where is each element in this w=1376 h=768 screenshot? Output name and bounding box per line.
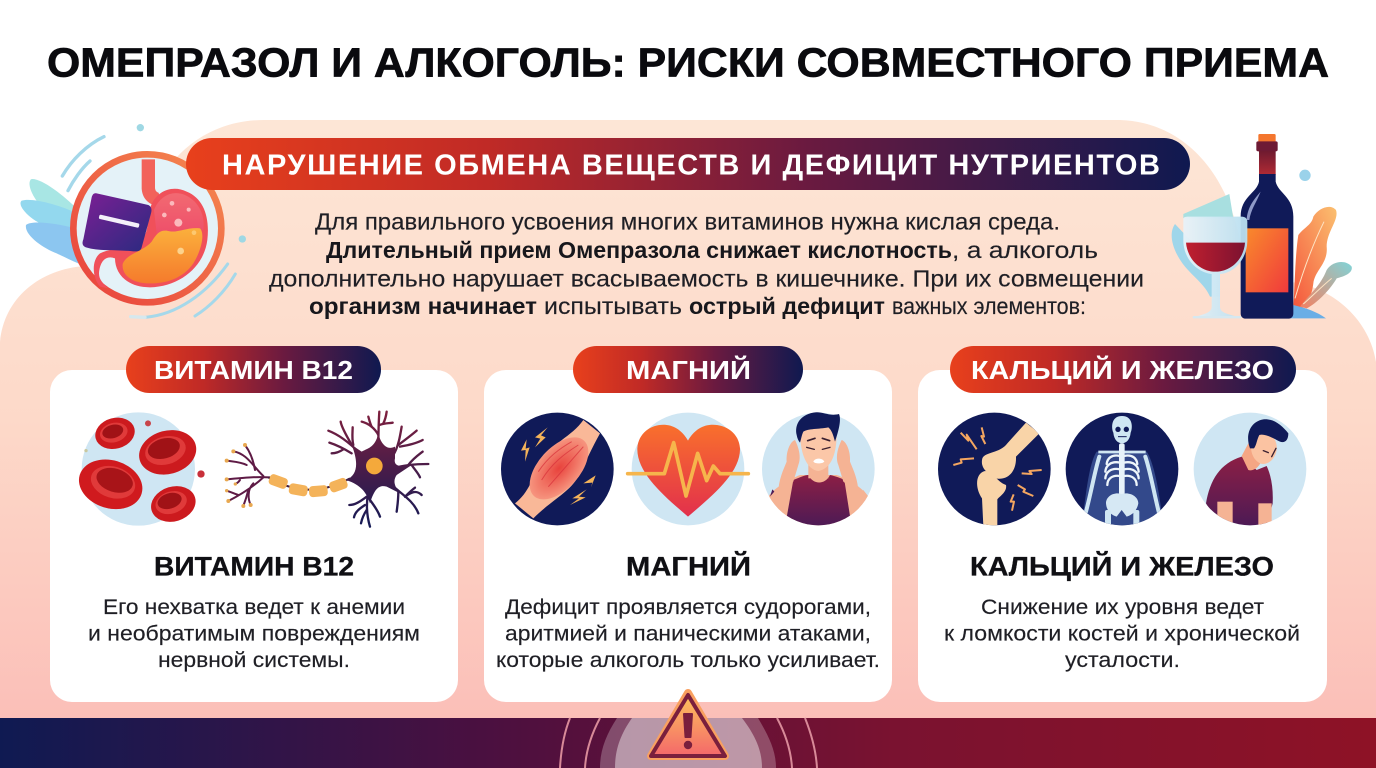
card heading: МАГНИЙ xyxy=(626,550,751,582)
card text: к ломкости костей и хронической xyxy=(944,622,1300,646)
card text: нервной системы. xyxy=(158,648,350,672)
intro text block: дополнительно нарушает всасываемость в кишечнике. При их совмещении xyxy=(269,266,1144,292)
intro text block: острый дефицит xyxy=(689,293,885,319)
icon: skeleton x-ray xyxy=(1066,413,1178,527)
pill label xyxy=(126,346,381,393)
bottom warning band xyxy=(0,718,1376,768)
card text: Его нехватка ведет к анемии xyxy=(103,595,405,619)
panel: magnesium xyxy=(484,346,892,702)
left dendrites xyxy=(227,445,270,506)
card text xyxy=(944,595,1300,672)
intro text block: важных элементов: xyxy=(892,293,1086,319)
leaves xyxy=(1293,207,1337,308)
intro text block xyxy=(269,208,1144,319)
icon: muscle cramp xyxy=(501,413,614,525)
section heading pill: НАРУШЕНИЕ ОБМЕНА ВЕЩЕСТВ И ДЕФИЦИТ НУТРИЕНТОВ xyxy=(222,150,1160,182)
pill label: КАЛЬЦИЙ И ЖЕЛЕЗО xyxy=(971,355,1274,385)
intro text block: испытывать xyxy=(544,293,682,319)
wings xyxy=(20,179,78,263)
icon: person with headache xyxy=(762,412,875,530)
intro text block: , а алкоголь xyxy=(952,237,1098,263)
pill label: ВИТАМИН B12 xyxy=(154,355,353,385)
card heading: ВИТАМИН B12 xyxy=(154,552,354,582)
intro text block: Для правильного усвоения многих витаминов нужна кислая среда. xyxy=(315,208,1060,234)
pill label xyxy=(950,346,1296,393)
icon: heart with pulse xyxy=(628,413,748,525)
motion lines xyxy=(62,137,235,317)
background blob panel xyxy=(0,120,1376,718)
icon: stomach with pill xyxy=(20,124,246,317)
soma xyxy=(346,433,412,503)
card text xyxy=(496,595,880,672)
title: ОМЕПРАЗОЛ И АЛКОГОЛЬ: РИСКИ СОВМЕСТНОГО ПРИЕМА xyxy=(47,40,1329,86)
blue backdrop shape xyxy=(1183,194,1233,218)
card text: Дефицит проявляется судорогами, xyxy=(505,595,871,619)
section heading pill xyxy=(186,138,1190,190)
purple pill xyxy=(83,193,151,251)
esophagus and stomach xyxy=(148,159,160,199)
card heading: КАЛЬЦИЙ И ЖЕЛЕЗО xyxy=(970,550,1274,582)
axon xyxy=(268,477,350,490)
panel: calcium and iron xyxy=(918,346,1327,702)
icon: tired person xyxy=(1194,413,1306,527)
card text: усталости. xyxy=(1065,648,1180,672)
intro text block: организм начинает xyxy=(309,293,537,319)
icon: red blood cells xyxy=(73,412,205,527)
icon: knee joint xyxy=(938,413,1051,526)
pill label: МАГНИЙ xyxy=(626,355,751,385)
pill label xyxy=(573,346,803,393)
card text: которые алкоголь только усиливает. xyxy=(496,648,880,672)
card text: Снижение их уровня ведет xyxy=(981,595,1264,619)
panel: vitamin B12 xyxy=(50,346,458,702)
intro text block: Длительный прием Омепразола снижает кислотность xyxy=(326,237,952,263)
card text: и необратимым повреждениям xyxy=(88,622,420,646)
icon: warning triangle xyxy=(651,693,725,756)
bottle xyxy=(1258,134,1276,143)
wine glass xyxy=(1183,217,1247,317)
card text xyxy=(88,595,420,672)
card text: аритмией и паническими атаками, xyxy=(505,622,871,646)
icon: neuron xyxy=(225,412,428,527)
icon: wine bottle and glass xyxy=(1172,134,1352,319)
